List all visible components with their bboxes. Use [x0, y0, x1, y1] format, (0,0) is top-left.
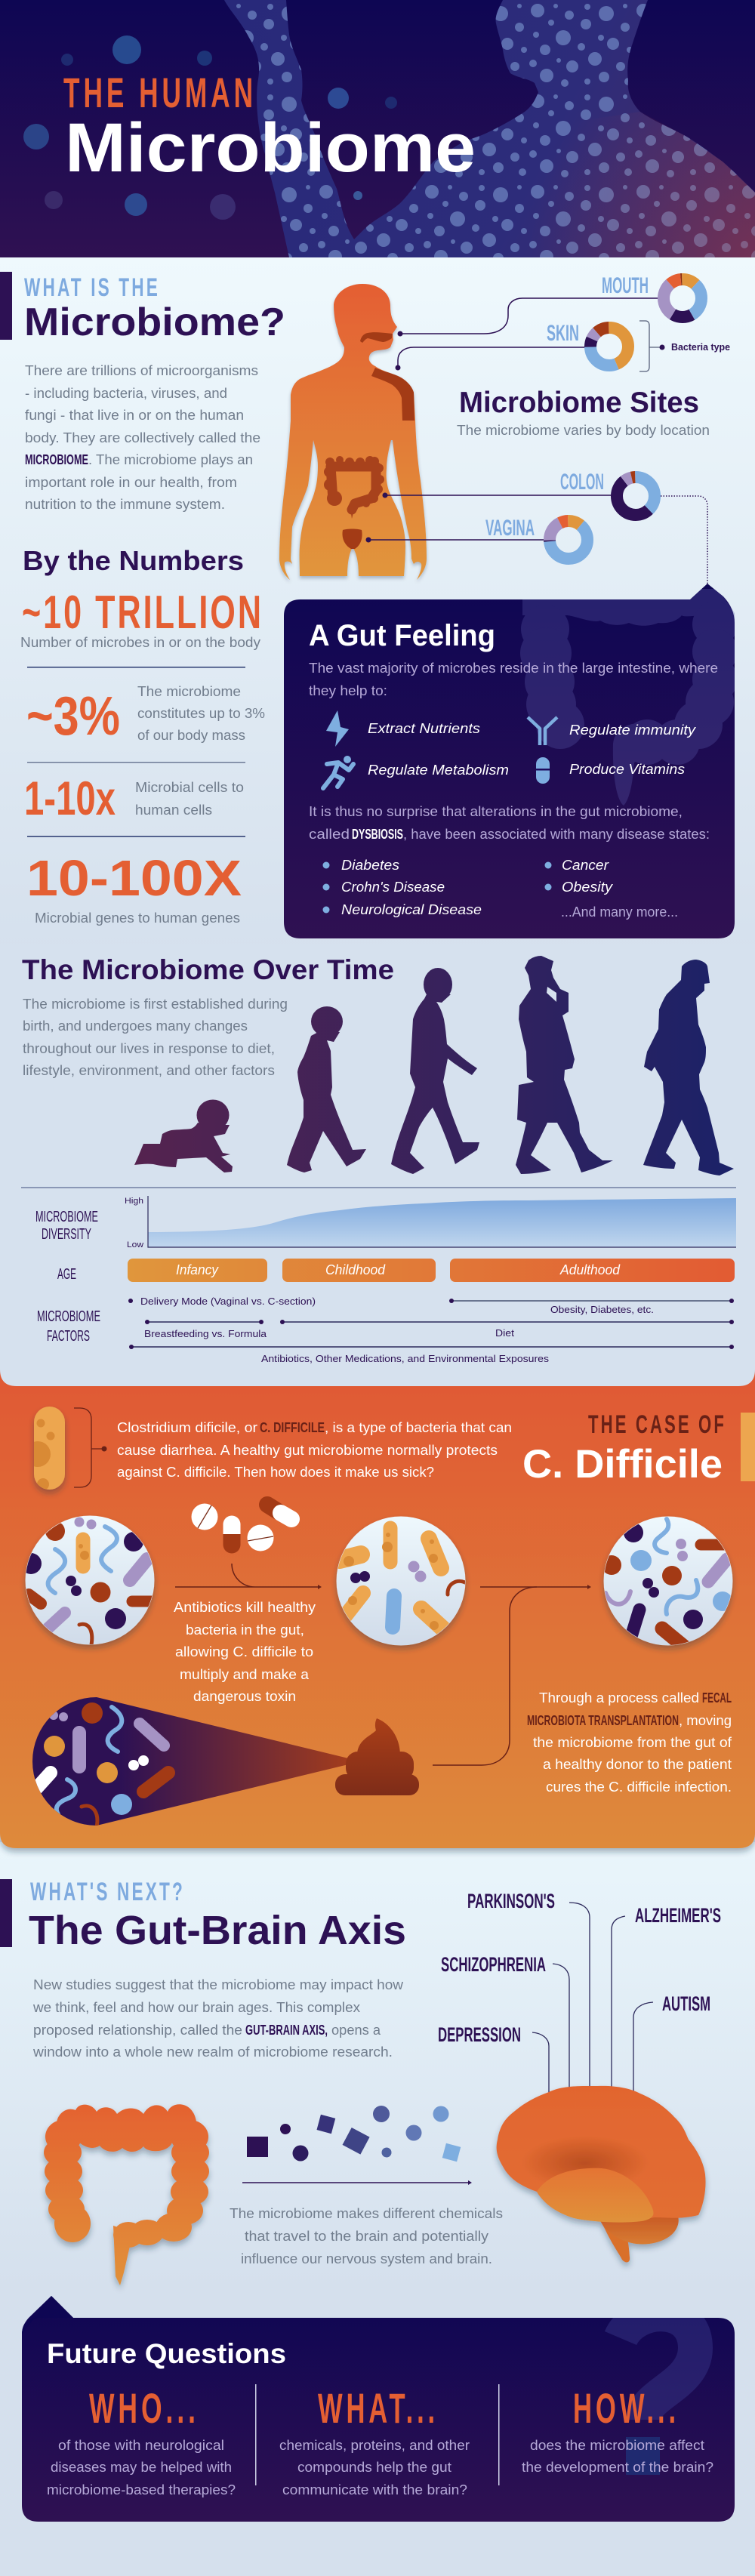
human body figure	[279, 284, 427, 580]
stat: 10-100x: 10-100X	[26, 850, 242, 907]
stat: 3 percent: of our body mass	[137, 728, 245, 743]
disease labels	[438, 1890, 721, 2046]
heading: by the numbers: By the Numbers	[23, 545, 244, 576]
text: fecal transplant: MICROBIOTA TRANSPLANTATION	[527, 1713, 679, 1728]
donut: mouth	[664, 279, 701, 317]
icon: runner	[323, 756, 353, 788]
factor timeline	[128, 1296, 734, 1364]
legend: bacteria type: Bacteria type	[671, 341, 730, 353]
stat: 10-100x	[26, 850, 242, 926]
uterus	[342, 528, 362, 549]
site label: vagina: VAGINA	[485, 516, 535, 541]
microbiome circle: restored	[602, 1516, 732, 1647]
title	[63, 69, 476, 186]
illustration: brain	[497, 2086, 706, 2262]
text: dysbiosis: called	[309, 827, 350, 842]
microbiome circle: healthy	[20, 1516, 154, 1645]
text: chemicals: The microbiome makes different chemicals	[230, 2206, 503, 2221]
text: intro: The vast majority of microbes reside in the large intestine, where	[309, 661, 718, 676]
text: chemicals: that travel to the brain and potentially	[245, 2229, 488, 2244]
disease labels: DEPRESSION	[438, 2023, 521, 2046]
site label: colon: COLON	[560, 470, 604, 495]
skin patch on shoulder	[371, 368, 414, 421]
title: THE HUMAN	[63, 69, 257, 116]
colon in body	[324, 456, 384, 519]
donut: skin	[590, 328, 628, 365]
disease list: Neurological Disease	[341, 902, 482, 917]
text: over time: throughout our lives in response to diet,	[23, 1041, 275, 1056]
page background: lower light section	[0, 1842, 755, 2576]
stat: 1-10x	[24, 772, 244, 825]
text: antibiotics	[174, 1600, 316, 1704]
column: what: WHAT...	[318, 2384, 439, 2432]
intro paragraph: nutrition to the immune system.	[25, 497, 225, 512]
panel: microbiome over time	[0, 944, 755, 1386]
label: age: AGE	[57, 1266, 76, 1283]
hero banner	[0, 0, 755, 257]
dotted human silhouettes	[224, 0, 755, 257]
orange panel: the case of C. difficile	[0, 1359, 755, 1848]
age bars: Childhood	[325, 1262, 386, 1277]
factor timeline: Breastfeeding vs. Formula	[144, 1328, 267, 1339]
disease connector lines	[532, 1903, 653, 2095]
text: c. difficile definition: cause diarrhea. A healthy gut microbiome normally protects	[117, 1443, 498, 1458]
site label: mouth: MOUTH	[602, 273, 649, 298]
disease labels: AUTISM	[662, 1992, 710, 2015]
text: gut-brain intro: GUT-BRAIN AXIS,	[245, 2023, 328, 2038]
text: gut-brain intro	[32, 1977, 404, 2060]
text: over time	[23, 997, 288, 1078]
column: who: of those with neurological	[58, 2438, 224, 2453]
age bars: Adulthood	[559, 1262, 621, 1277]
text: gut-brain intro: we think, feel and how our brain ages. This complex	[32, 2000, 360, 2015]
ghost colon	[520, 589, 740, 806]
text: c. difficile definition: , is a type of bacteria that can	[325, 1420, 512, 1435]
intro paragraph: MICROBIOME	[25, 452, 88, 467]
legend: bacteria type	[639, 321, 730, 371]
text: antibiotics: bacteria in the gut,	[186, 1622, 304, 1638]
arrow: gut to brain	[242, 2180, 472, 2185]
heading: Microbiome Sites: Microbiome Sites	[459, 387, 699, 419]
column: who: WHO...	[89, 2384, 199, 2432]
disease list	[323, 858, 678, 920]
stat: 1-10x: human cells	[135, 803, 212, 818]
chemical shapes	[247, 2106, 461, 2162]
stat: 3 percent	[26, 684, 265, 747]
text: dysbiosis: , have been associated with many disease states:	[403, 827, 710, 842]
stat: 10-100x: Microbial genes to human genes	[35, 911, 240, 926]
ghost question mark	[621, 2314, 695, 2475]
label: regulate metabolism: Regulate Metabolism	[368, 763, 509, 778]
factor timeline: Delivery Mode (Vaginal vs. C-section)	[140, 1296, 316, 1307]
arrow: to restored microbiome	[433, 1585, 591, 1765]
icon: antibody	[528, 717, 557, 745]
column: how	[522, 2384, 713, 2475]
intro paragraph	[25, 363, 260, 512]
stat: 10 trillion: ~10 TRILLION	[22, 587, 263, 639]
panel: a gut feeling	[284, 584, 740, 938]
column: how: HOW...	[573, 2384, 680, 2432]
microbiome circle: after antibiotics	[337, 1516, 467, 1646]
intro paragraph: . The microbiome plays an	[88, 452, 253, 467]
column: who: diseases may be helped with	[51, 2460, 232, 2475]
column: who: microbiome-based therapies?	[47, 2482, 236, 2497]
arrow: antibiotics	[175, 1564, 322, 1589]
connector: skin	[396, 347, 585, 370]
text: fecal transplant: , moving	[679, 1713, 732, 1728]
text: antibiotics: multiply and make a	[180, 1667, 310, 1682]
text: gut-brain intro: window into a whole new realm of microbiome research.	[32, 2044, 393, 2060]
text: over time: birth, and undergoes many changes	[23, 1018, 248, 1034]
section heading: the gut-brain axis: WHAT'S NEXT?	[30, 1878, 185, 1906]
text: c. difficile definition: Clostridium dificile, or	[117, 1420, 257, 1435]
disease list: Obesity	[562, 880, 613, 895]
column: what: communicate with the brain?	[282, 2482, 467, 2497]
disease list: Diabetes	[341, 858, 399, 873]
text: dysbiosis	[309, 804, 710, 842]
disease list: Crohn's Disease	[341, 880, 445, 895]
stat: 10 trillion	[20, 587, 263, 650]
title: Microbiome	[65, 109, 476, 186]
donut: colon	[617, 477, 655, 515]
icon: c. difficile bacterium	[25, 1407, 107, 1490]
text: over time: lifestyle, environment, and other factors	[23, 1063, 275, 1078]
intro paragraph: fungi - that live in or on the human	[25, 408, 244, 423]
stat: 3 percent: The microbiome	[137, 684, 241, 699]
older adult	[643, 960, 734, 1176]
connector: vagina	[365, 538, 553, 542]
intro paragraph: body. They are collectively called the	[25, 430, 260, 445]
text: intro: they help to:	[309, 683, 387, 698]
text: fecal transplant: FECAL	[702, 1690, 732, 1706]
column: what: chemicals, proteins, and other	[279, 2438, 470, 2453]
donut: vagina	[550, 521, 587, 559]
column: how: the development of the brain?	[522, 2460, 713, 2475]
teen	[391, 968, 479, 1174]
text: gut-brain intro: opens a	[331, 2023, 381, 2038]
column: what: compounds help the gut	[297, 2460, 451, 2475]
age bars: Infancy	[176, 1262, 219, 1277]
disease list: ...And many more...	[561, 904, 678, 920]
panel: by the numbers	[20, 545, 265, 926]
intro paragraph: There are trillions of microorganisms	[25, 363, 258, 378]
section heading: What is the Microbiome: WHAT IS THE	[24, 273, 160, 302]
text: c. difficile definition: C. DIFFICILE	[260, 1420, 325, 1435]
chart: microbiome diversity: MICROBIOME	[35, 1209, 98, 1225]
icon: stool	[335, 1718, 419, 1795]
chart: microbiome diversity: Low	[127, 1240, 143, 1249]
connector: colon	[382, 492, 613, 498]
text: antibiotics: Antibiotics kill healthy	[174, 1600, 316, 1615]
icon: antibiotic pills	[192, 1504, 291, 1551]
child	[287, 1006, 366, 1172]
text: antibiotics: dangerous toxin	[193, 1689, 296, 1704]
chart: microbiome diversity: DIVERSITY	[42, 1226, 91, 1243]
panel: future questions	[22, 2296, 735, 2522]
site label: skin: SKIN	[547, 321, 579, 346]
heading: the case of c. difficile	[522, 1410, 755, 1487]
text: fecal transplant	[527, 1690, 732, 1795]
text: dysbiosis: It is thus no surprise that alterations in the gut microbiome,	[309, 804, 683, 819]
factor timeline: Antibiotics, Other Medications, and Environmental Exposures	[261, 1353, 550, 1364]
adult with briefcase	[516, 956, 613, 1174]
text: over time: The microbiome is first established during	[23, 997, 288, 1012]
label: produce vitamins: Produce Vitamins	[569, 762, 685, 777]
chart: microbiome diversity	[35, 1196, 736, 1249]
disease labels: SCHIZOPHRENIA	[441, 1953, 546, 1976]
text: fecal transplant: the microbiome from the gut of	[533, 1735, 732, 1750]
connector: mouth	[397, 298, 658, 337]
dotted connector to gut panel	[661, 496, 707, 585]
throat and mouth	[360, 332, 393, 343]
factor timeline: Obesity, Diabetes, etc.	[550, 1304, 654, 1315]
text: fecal transplant: Through a process called	[539, 1690, 699, 1706]
silhouettes: life stages	[134, 956, 734, 1176]
text: intro	[309, 661, 718, 698]
text: dysbiosis: DYSBIOSIS	[352, 827, 403, 842]
heading: future questions: Future Questions	[47, 2338, 286, 2369]
stat: 1-10x: Microbial cells to	[135, 780, 244, 795]
section heading: What is the Microbiome	[0, 272, 285, 344]
heading: the case of c. difficile: C. Difficile	[522, 1442, 723, 1487]
caption: sites: The microbiome varies by body location	[457, 423, 710, 438]
column: what	[279, 2384, 470, 2497]
icon: pill	[536, 757, 550, 784]
baby	[134, 1099, 233, 1172]
stat: 3 percent: constitutes up to 3%	[137, 706, 265, 721]
illustration: large intestine	[44, 2104, 209, 2285]
chart: microbiome diversity: High	[125, 1197, 143, 1206]
disease list: Cancer	[562, 858, 609, 873]
column: who	[47, 2384, 236, 2497]
label: microbiome factors: FACTORS	[47, 1328, 90, 1345]
label: microbiome factors	[37, 1308, 100, 1345]
text: fecal transplant: a healthy donor to the patient	[543, 1757, 732, 1772]
heading: microbiome over time: The Microbiome Over Time	[22, 954, 394, 985]
floating microbe dots	[23, 35, 397, 220]
magnifying cone: donor microbiome	[32, 1697, 361, 1827]
stat: 10 trillion: Number of microbes in or on the body	[20, 635, 260, 650]
disease labels: PARKINSON'S	[467, 1890, 555, 1912]
intro paragraph: - including bacteria, viruses, and	[25, 386, 227, 401]
text: chemicals: influence our nervous system and brain.	[241, 2251, 492, 2266]
age bars	[128, 1259, 735, 1282]
stat: 3 percent: ~3%	[26, 686, 120, 747]
text: c. difficile definition: against C. difficile. Then how does it make us sick?	[117, 1465, 434, 1480]
label: extract nutrients: Extract Nutrients	[368, 721, 480, 736]
intro paragraph: important role in our health, from	[25, 475, 237, 490]
text: gut-brain intro: proposed relationship, called the	[33, 2023, 242, 2038]
text: chemicals	[230, 2206, 503, 2266]
column: how: does the microbiome affect	[530, 2438, 704, 2453]
text: c. difficile definition	[117, 1420, 512, 1480]
page background: upper light section	[0, 257, 755, 1397]
factor timeline: Diet	[495, 1327, 514, 1339]
section heading: What is the Microbiome: Microbiome?	[24, 300, 285, 344]
text: gut-brain intro: New studies suggest that the microbiome may impact how	[33, 1977, 404, 1992]
section heading: the gut-brain axis	[0, 1878, 406, 1953]
text: fecal transplant: cures the C. difficile infection.	[546, 1779, 732, 1795]
section heading: the gut-brain axis: The Gut-Brain Axis	[29, 1908, 406, 1953]
heading: a gut feeling: A Gut Feeling	[309, 619, 495, 652]
stat: 1-10x: 1-10x	[24, 772, 116, 825]
icon: lightning	[326, 710, 349, 747]
label: regulate immunity: Regulate immunity	[569, 723, 696, 738]
text: antibiotics: allowing C. difficile to	[175, 1644, 313, 1659]
label: microbiome factors: MICROBIOME	[37, 1308, 100, 1325]
